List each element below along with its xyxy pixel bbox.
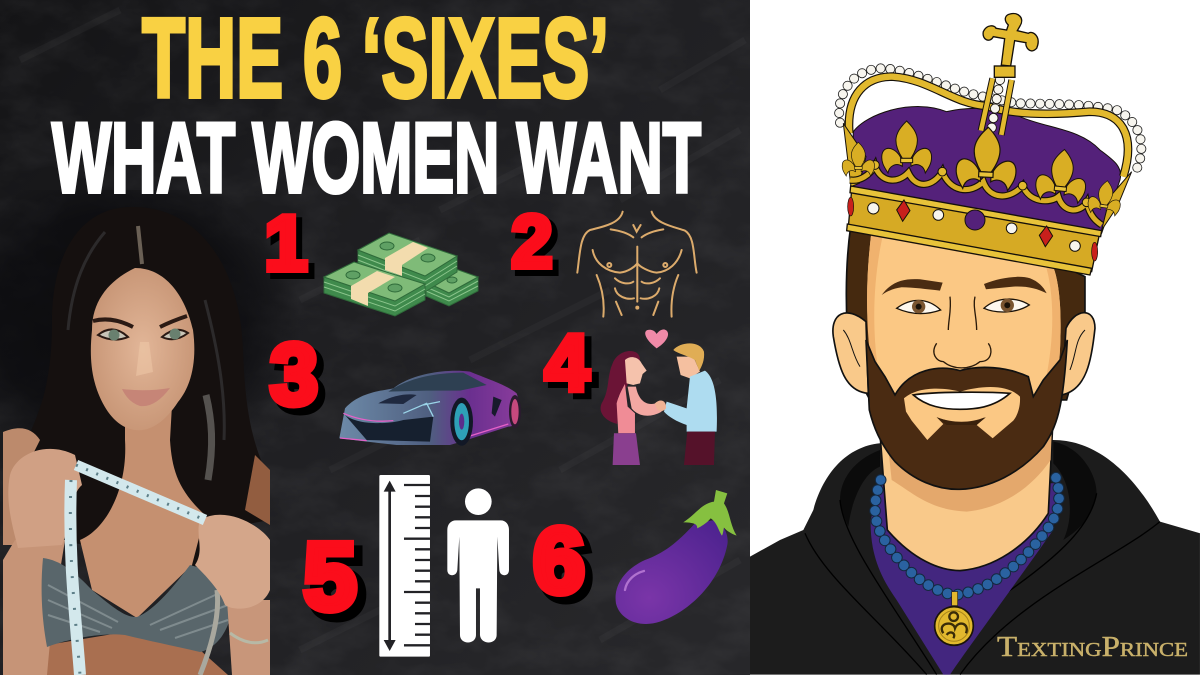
number 1: 1: [264, 199, 308, 287]
stomach: [47, 632, 228, 675]
crown knobs: [871, 161, 1091, 207]
crown: [839, 14, 1141, 275]
number 3: 3: [276, 333, 324, 429]
left hand and arm: [3, 449, 82, 675]
medallion: [935, 592, 973, 645]
illustration: man wearing crown: [750, 14, 1200, 675]
purple cap: [852, 107, 1121, 233]
measuring tape: [70, 465, 205, 675]
side gold corners: [843, 123, 1132, 230]
icon: purple sports car: [339, 371, 521, 446]
gold arches: [849, 77, 1128, 177]
heart: [645, 329, 668, 348]
ears: [833, 313, 1095, 395]
number 1: 1: [269, 204, 313, 292]
number 2: 2: [516, 205, 558, 288]
right hand and arm: [195, 515, 270, 675]
eyes: [897, 299, 1029, 314]
icon: stacks of cash: [324, 233, 478, 316]
cross: [983, 14, 1038, 66]
number 5: 5: [304, 524, 356, 630]
number 4: 4: [551, 323, 596, 412]
nose: [934, 297, 991, 368]
man: [664, 343, 717, 465]
pearl arches: [839, 68, 1141, 173]
bead necklace: [875, 472, 1059, 595]
face: [867, 230, 1061, 433]
illustration: woman with measuring tape: [3, 207, 270, 675]
number 6: 6: [533, 510, 585, 612]
icon: height ruler and person: [379, 475, 509, 657]
fleurs-de-lis: [842, 121, 1123, 216]
heading: What Women Want: WHAT WOMEN WANT: [52, 102, 701, 213]
right white background: [750, 0, 1200, 675]
lips: [122, 388, 170, 406]
beard: [866, 340, 1067, 489]
ruler: [379, 475, 430, 657]
neck: [880, 427, 1053, 571]
narrow tape end: [200, 590, 218, 675]
logo text: TextingPrince: TextingPrince: [997, 631, 1188, 663]
panel: chalkboard background: [0, 0, 750, 675]
hoodie: [750, 440, 1200, 675]
scalloped rim: [850, 166, 1102, 225]
right stack: [426, 268, 478, 306]
number 6: 6: [539, 516, 591, 618]
eyebrows: [882, 277, 1047, 295]
center post: [981, 66, 1015, 135]
icon: muscular torso outline: [577, 212, 697, 317]
top stack: [358, 233, 457, 292]
number 3: 3: [270, 327, 318, 423]
woman: [601, 351, 662, 465]
crown band: [847, 186, 1102, 275]
neck and chest: [80, 405, 205, 618]
shoulders and upper arms: [3, 428, 40, 545]
number 4: 4: [545, 318, 590, 407]
nose highlight: [136, 342, 153, 376]
knitted top: [42, 558, 231, 652]
face: [91, 268, 194, 430]
number 2: 2: [511, 200, 553, 283]
number 5: 5: [311, 531, 363, 637]
hair: [846, 227, 1085, 400]
icon: eggplant: [616, 490, 737, 624]
person silhouette: [447, 488, 509, 642]
hair: [31, 262, 264, 566]
icon: couple holding hands with heart: [601, 329, 717, 465]
eyes: [93, 316, 188, 340]
front stack: [324, 262, 425, 316]
purple shirt: [871, 483, 1057, 675]
chin skin and mouth: [904, 387, 1020, 440]
